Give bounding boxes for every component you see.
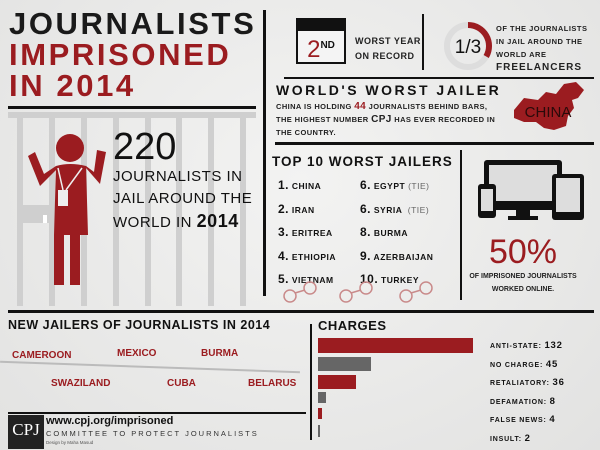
stat: 220 journalists: 220 <box>113 126 176 168</box>
panel: world's worst jailer: THE HIGHEST NUMBER CPJ HAS EVER RECORDED IN <box>276 114 495 125</box>
panel: world's worst jailer: THE COUNTRY. <box>276 128 336 137</box>
text: 9. AZERBAIJAN <box>360 248 433 262</box>
icon: prisoner figure <box>28 134 106 285</box>
text: freelancers: IN JAIL AROUND THE <box>496 37 583 46</box>
stat: 220 journalists: WORLD IN 2014 <box>113 211 239 231</box>
icon: calendar 2nd: 2ND <box>307 36 335 63</box>
stat: 50% online <box>469 233 577 293</box>
text: 10. TURKEY <box>360 272 419 286</box>
panel: new jailers: MEXICO <box>117 348 156 359</box>
stat: 220 journalists <box>113 126 252 231</box>
chart: 1/3 donut: 1/3 <box>455 37 481 58</box>
logo: CPJ: CPJ <box>12 420 40 439</box>
bar chart: charges: FALSE NEWS: 4 <box>490 414 555 425</box>
text: 2. IRAN <box>278 202 315 216</box>
bar chart: charges: ANTI-STATE: 132 <box>490 340 563 351</box>
bar chart: charges: NO CHARGE: 45 <box>490 358 558 370</box>
panel: world's worst jailer: CHINA IS HOLDING 44 JOURNALISTS BEHIND BARS, <box>276 101 487 112</box>
stat: 220 journalists: JOURNALISTS IN <box>113 168 243 185</box>
text: freelancers: WORLD ARE <box>496 50 546 59</box>
stat: 50% online: OF IMPRISONED JOURNALISTS <box>469 273 577 280</box>
icon: handcuffs <box>283 281 433 303</box>
panel: new jailers <box>0 318 300 389</box>
text: freelancers <box>496 24 588 73</box>
panel: new jailers: CUBA <box>167 378 196 389</box>
icon: china map: CHINA <box>525 104 571 121</box>
title: IMPRISONED <box>9 37 231 72</box>
text: worst year: WORST YEAR <box>355 36 421 46</box>
panel: world's worst jailer <box>276 82 501 137</box>
panel: new jailers: CAMEROON <box>12 350 71 361</box>
logo: CPJ <box>8 415 44 449</box>
panel: new jailers: BELARUS <box>248 378 296 389</box>
footer text: Design by Maha Masud <box>46 440 93 445</box>
stat: 50% online: 50% <box>489 233 557 271</box>
footer text <box>46 415 259 445</box>
text: worst year <box>355 36 421 61</box>
icon: calendar 2nd <box>296 18 346 64</box>
text: freelancers: FREELANCERS <box>496 62 582 73</box>
bar chart: charges: CHARGES <box>318 318 387 333</box>
panel: world's worst jailer: WORLD'S WORST JAILER <box>276 82 501 98</box>
stat: 50% online: WORKED ONLINE. <box>492 286 554 293</box>
text: 6. SYRIA (TIE) <box>360 202 429 216</box>
footer text: www.cpj.org/imprisoned <box>46 415 173 427</box>
icon: devices <box>478 160 584 220</box>
title <box>9 6 256 103</box>
text: 4. ETHIOPIA <box>278 248 336 262</box>
text: freelancers: OF THE JOURNALISTS <box>496 24 588 33</box>
text: 3. ERITREA <box>278 225 333 239</box>
stat: 220 journalists: JAIL AROUND THE <box>113 190 252 207</box>
icon: china map <box>514 82 584 130</box>
jail bars illustration <box>8 112 256 306</box>
bar chart: charges: DEFAMATION: 8 <box>490 396 556 406</box>
panel: top 10 worst jailers: TOP 10 WORST JAILERS <box>272 154 453 169</box>
text: worst year: ON RECORD <box>355 51 415 61</box>
footer text: COMMITTEE TO PROTECT JOURNALISTS <box>46 429 259 438</box>
panel: new jailers: NEW JAILERS OF JOURNALISTS IN 2014 <box>8 318 270 332</box>
text: 6. EGYPT (TIE) <box>360 178 429 192</box>
text: 5. VIETNAM <box>278 272 334 286</box>
panel: top 10 worst jailers <box>272 154 453 286</box>
title: JOURNALISTS <box>9 6 256 41</box>
bar chart: charges <box>318 318 565 444</box>
text: 8. BURMA <box>360 225 408 239</box>
panel: new jailers: BURMA <box>201 348 238 359</box>
chart: 1/3 donut <box>444 22 492 70</box>
bar chart: charges: INSULT: 2 <box>490 432 531 444</box>
title: IN 2014 <box>9 68 136 103</box>
bar chart: charges: RETALIATORY: 36 <box>490 377 565 388</box>
text: 1. CHINA <box>278 178 321 192</box>
panel: new jailers: SWAZILAND <box>51 378 110 389</box>
